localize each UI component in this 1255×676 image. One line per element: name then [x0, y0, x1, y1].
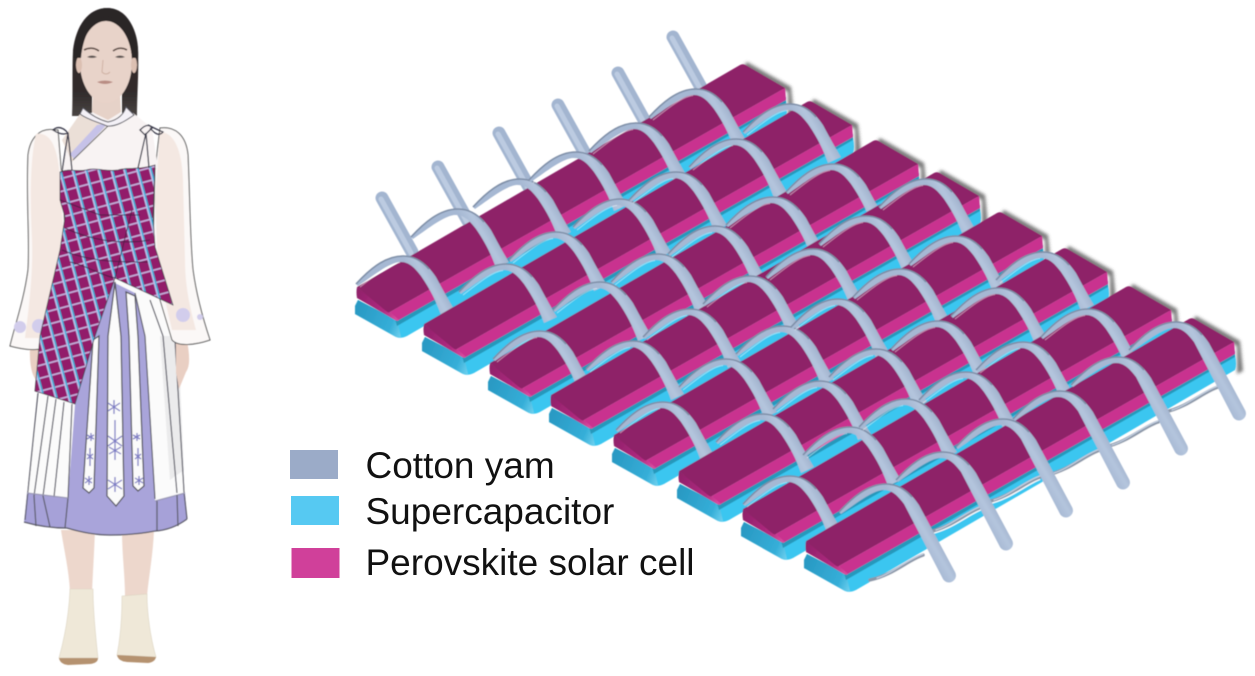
row 5: cell strip and yarn arcs [612, 210, 1051, 486]
skirt hem band [24, 493, 68, 528]
right sleeve [153, 128, 210, 345]
row 1: cell strip and yarn arcs [355, 62, 794, 338]
snowflake motifs [85, 400, 143, 492]
pleat lines [24, 293, 187, 535]
cuff flowers [14, 319, 46, 333]
row 3: cell strip and yarn arcs [488, 138, 927, 414]
solar textile bodice [35, 165, 173, 404]
illustration: model wearing the solar textile dress [10, 8, 210, 665]
row 7: cell strip and yarn arcs [741, 284, 1180, 560]
neck [92, 92, 121, 120]
legend [290, 445, 695, 583]
row 8: cell strip, lower yarn and long yarn ends [804, 316, 1246, 592]
face [74, 8, 138, 103]
legs [61, 530, 154, 596]
hands [30, 340, 189, 389]
top yarn ends [381, 37, 703, 253]
legend item: perovskite solar cell: Perovskite solar cell [366, 542, 695, 583]
row 4: cell strip and yarn arcs [549, 170, 988, 446]
blouse yoke [60, 113, 158, 176]
legend item: supercapacitor: Supercapacitor [366, 491, 614, 532]
left sleeve [10, 130, 68, 350]
boots [59, 589, 156, 665]
mandarin collar [80, 107, 134, 126]
row 2: cell strip and yarn arcs [422, 99, 861, 375]
skirt with pleats [24, 278, 187, 535]
centre skirt panel [65, 282, 155, 535]
legend item: cotton yarn: Cotton yam [366, 445, 555, 486]
decorative skirt strips [83, 282, 144, 506]
woven textile of solar cells, supercapacitors and cotton yarn [355, 37, 1246, 592]
hair [72, 8, 138, 116]
row 6: cell strip and yarn arcs [677, 246, 1116, 522]
shoulder ties [53, 125, 163, 172]
